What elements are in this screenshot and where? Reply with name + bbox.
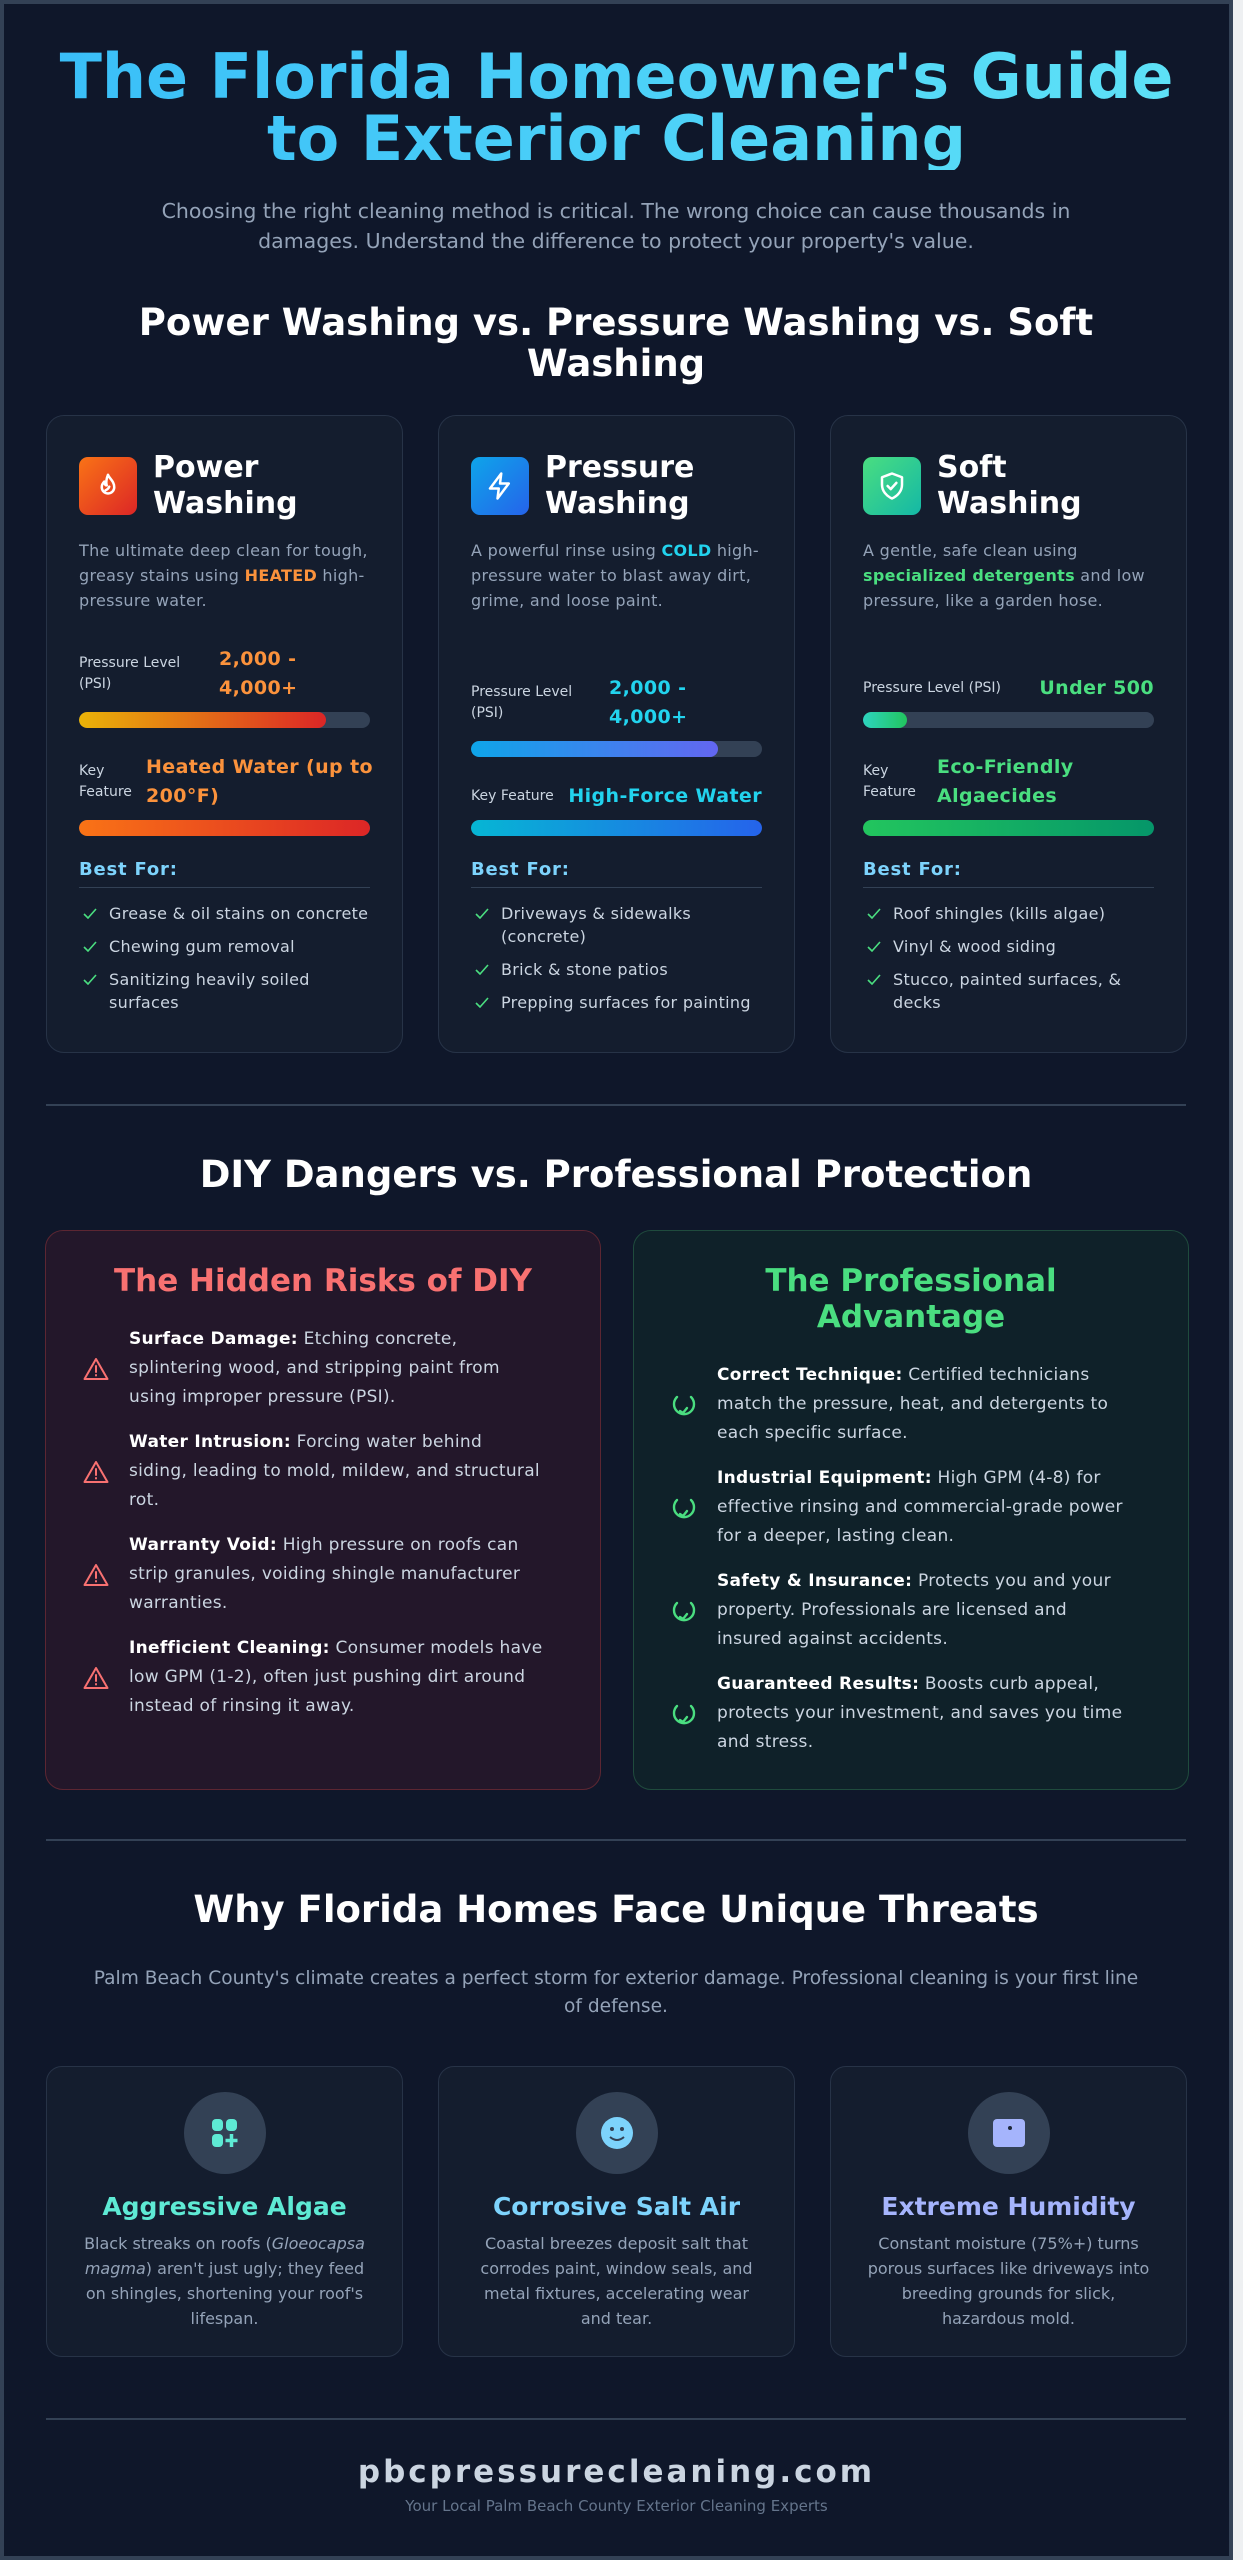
heading: DIY vs pro: DIY Dangers vs. Professional Protection xyxy=(200,1153,1032,1196)
panel title: Advantage xyxy=(817,1299,1005,1335)
description: pressure, like a garden hose. xyxy=(863,591,1103,610)
advantage item: Guaranteed Results: Boosts curb appeal, protects your investment, and saves you time and stress. xyxy=(717,1674,1122,1752)
footer domain: pbcpressurecleaning.com xyxy=(358,2454,875,2490)
stat: key feature: Key xyxy=(79,763,104,779)
icon: humidity xyxy=(968,2092,1050,2174)
panel: power washing: Grease & oil stains on concrete xyxy=(109,904,368,923)
stat: key feature: Eco-Friendly xyxy=(937,756,1074,778)
panel: power washing: Chewing gum removal xyxy=(109,937,295,956)
description: grime, and loose paint. xyxy=(471,591,663,610)
stat: key feature xyxy=(471,785,762,807)
stat: pressure: Under 500 xyxy=(1039,677,1154,699)
description: The ultimate deep clean for tough, xyxy=(79,541,368,560)
best for xyxy=(471,858,762,888)
stat: key feature: Key Feature xyxy=(471,788,554,804)
panel: DIY risks xyxy=(45,1230,601,1790)
stat: key feature xyxy=(79,756,373,807)
stat: pressure xyxy=(79,648,297,699)
card header: Pressure xyxy=(545,450,694,485)
stat: pressure: 2,000 - xyxy=(609,677,686,699)
panel: soft washing: Roof shingles (kills algae) xyxy=(893,904,1105,923)
stat: pressure: Pressure Level xyxy=(79,655,180,671)
panel: algae: Black streaks on roofs (Gloeocapsa magma) aren't just ugly; they feed on shingles, shortening your roof's lifespan. xyxy=(84,2234,365,2328)
stat: pressure xyxy=(471,677,687,728)
advantage item: Safety & Insurance: Protects you and your property. Professionals are licensed and insured against accidents. xyxy=(717,1571,1111,1649)
panel title xyxy=(765,1263,1057,1335)
subtitle xyxy=(162,199,1070,253)
heading: Florida threats: Why Florida Homes Face Unique Threats xyxy=(193,1888,1039,1931)
description: A powerful rinse using COLD high- xyxy=(471,541,759,560)
stat: key feature xyxy=(863,756,1074,807)
icon: shield xyxy=(863,457,921,515)
card header: Soft xyxy=(937,450,1007,485)
best for xyxy=(863,858,1154,888)
icon: algae xyxy=(184,2092,266,2174)
heading: comparison: Power Washing vs. Pressure Washing vs. Soft Washing xyxy=(139,301,1093,385)
card header: Washing xyxy=(545,486,690,521)
description xyxy=(471,541,759,610)
best for: Best For: xyxy=(863,859,962,880)
stat: key feature: Key xyxy=(863,763,888,779)
icon: smiley xyxy=(576,2092,658,2174)
panel: humidity: Constant moisture (75%+) turns porous surfaces like driveways into breeding grounds for slick, hazardous mold. xyxy=(868,2234,1149,2328)
footer xyxy=(358,2454,875,2515)
panel: professional advantage xyxy=(633,1230,1189,1790)
stat: pressure: (PSI) xyxy=(471,705,503,721)
card header: Washing xyxy=(153,486,298,521)
stat: key feature: Algaecides xyxy=(937,785,1057,807)
panel: power washing: Sanitizing heavily soiled surfaces xyxy=(109,970,310,1012)
stat: pressure xyxy=(863,677,1154,699)
stat: key feature: Feature xyxy=(863,784,916,800)
panel: pressure washing xyxy=(438,415,795,1053)
stat: pressure: 2,000 - xyxy=(219,648,296,670)
panel title: The Hidden Risks of DIY xyxy=(114,1263,532,1299)
subtitle: damages. Understand the difference to protect your property's value. xyxy=(258,229,974,253)
panel: algae xyxy=(46,2066,403,2357)
best for xyxy=(79,858,370,888)
panel: pressure washing: Brick & stone patios xyxy=(501,960,668,979)
card header: Washing xyxy=(937,486,1082,521)
description xyxy=(863,541,1145,610)
threats subtitle: Palm Beach County's climate creates a perfect storm for exterior damage. Professional cleaning is your first line xyxy=(94,1968,1138,1989)
panel: salt air: Corrosive Salt Air xyxy=(493,2192,740,2221)
risk item: Water Intrusion: Forcing water behind siding, leading to mold, mildew, and structural rot. xyxy=(129,1432,540,1510)
stat: key feature: 200°F) xyxy=(146,785,219,807)
description xyxy=(78,541,368,610)
best for: Best For: xyxy=(471,859,570,880)
footer tagline: Your Local Palm Beach County Exterior Cleaning Experts xyxy=(405,2497,828,2515)
stat: pressure: Pressure Level (PSI) xyxy=(863,680,1001,696)
risk item: Warranty Void: High pressure on roofs can strip granules, voiding shingle manufacturer warranties. xyxy=(129,1535,520,1613)
title: to Exterior Cleaning xyxy=(267,102,966,175)
title xyxy=(4,46,1229,170)
subtitle: Choosing the right cleaning method is critical. The wrong choice can cause thousands in xyxy=(162,199,1070,223)
stat: pressure: Pressure Level xyxy=(471,684,572,700)
card header: Power xyxy=(153,450,258,485)
description: pressure water to blast away dirt, xyxy=(471,566,751,585)
stat: key feature: Heated Water (up to xyxy=(146,756,373,778)
stat: pressure: 4,000+ xyxy=(219,677,297,699)
advantage item: Correct Technique: Certified technicians match the pressure, heat, and detergents to each specific surface. xyxy=(717,1365,1108,1443)
panel: pressure washing: Driveways & sidewalks (concrete) xyxy=(501,904,691,946)
description: greasy stains using HEATED high- xyxy=(79,566,365,585)
threats subtitle: of defense. xyxy=(564,1996,668,2017)
panel: humidity xyxy=(830,2066,1187,2357)
description: pressure water. xyxy=(79,591,207,610)
title: The Florida Homeowner's Guide xyxy=(60,40,1173,113)
stat: pressure: (PSI) xyxy=(79,676,111,692)
stat: pressure: 4,000+ xyxy=(609,706,687,728)
panel: humidity: Extreme Humidity xyxy=(881,2192,1136,2221)
panel: soft washing xyxy=(830,415,1187,1053)
card header xyxy=(863,450,1082,521)
panel: pressure washing: Prepping surfaces for painting xyxy=(501,993,751,1012)
panel title: The Professional xyxy=(765,1263,1057,1299)
panel: salt air: Coastal breezes deposit salt that corrodes paint, window seals, and metal fixtures, accelerating wear and tear. xyxy=(480,2234,753,2328)
card header xyxy=(79,450,298,521)
panel: soft washing: Vinyl & wood siding xyxy=(893,937,1056,956)
panel: soft washing: Stucco, painted surfaces, & decks xyxy=(893,970,1121,1012)
icon: flame xyxy=(79,457,137,515)
advantage item: Industrial Equipment: High GPM (4-8) for effective rinsing and commercial-grade power for a deeper, lasting clean. xyxy=(717,1468,1123,1546)
description: specialized detergents and low xyxy=(863,566,1145,585)
risk item: Surface Damage: Etching concrete, splintering wood, and stripping paint from using improper pressure (PSI). xyxy=(129,1329,500,1407)
risk item: Inefficient Cleaning: Consumer models have low GPM (1-2), often just pushing dirt around instead of rinsing it away. xyxy=(129,1638,542,1716)
threats subtitle xyxy=(94,1968,1138,2017)
best for: Best For: xyxy=(79,859,178,880)
stat: key feature: High-Force Water xyxy=(568,785,762,807)
panel: power washing xyxy=(46,415,403,1053)
description: A gentle, safe clean using xyxy=(863,541,1078,560)
card header xyxy=(471,450,694,521)
stat: key feature: Feature xyxy=(79,784,132,800)
icon: lightning xyxy=(471,457,529,515)
panel: algae: Aggressive Algae xyxy=(102,2192,347,2221)
panel: salt air xyxy=(438,2066,795,2357)
